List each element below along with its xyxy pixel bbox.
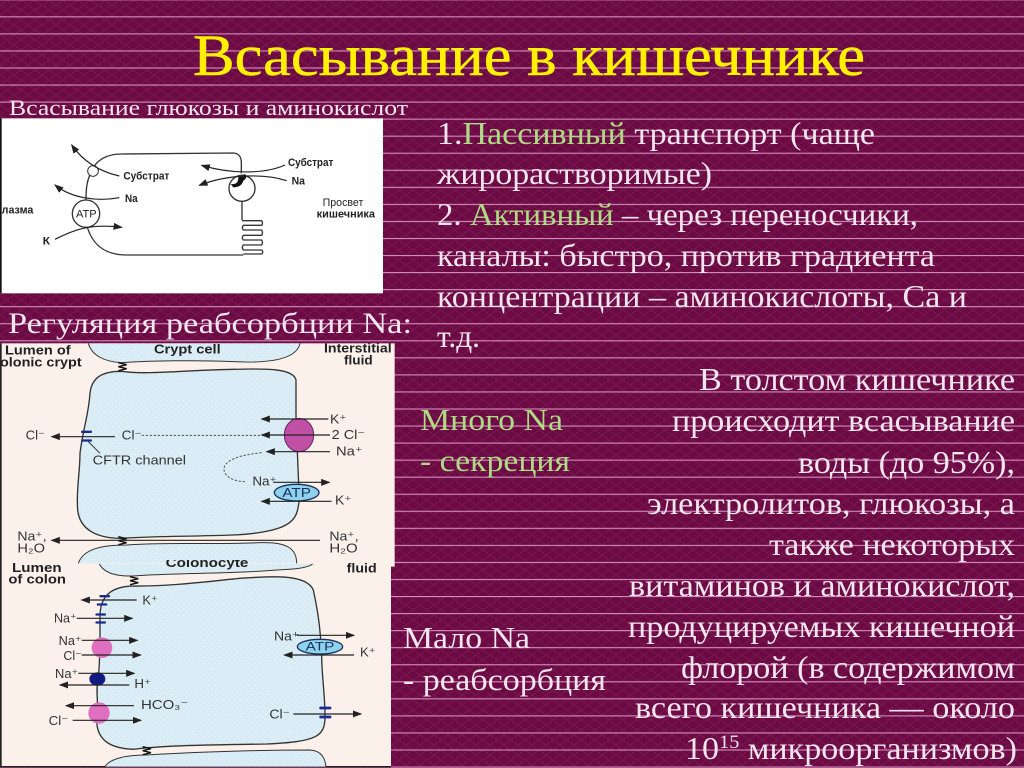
text: low sodium reabsorption: - реабсорбция [403,662,606,697]
text block: large intestine absorption: всего кишечника — около [635,689,1015,725]
text block: large intestine absorption: флорой (в содержимом [681,649,1015,685]
text block: large intestine absorption: продуцируемых кишечной [628,608,1015,644]
icon: cotransporter right [229,174,255,201]
text block: transport types: каналы: быстро, против градиента [437,237,935,273]
text block: transport types: 1.Пассивный транспорт (чаще [437,115,875,151]
diagram labels: лазма [2,205,33,217]
icon: cotransporter [284,418,314,452]
diagram labels: H₂O [17,541,45,555]
icon: substrate carrier left [88,166,98,176]
icon: ATP pump [72,200,100,227]
icon: ATP pump: ATP [282,486,311,500]
transport arrows [60,600,361,720]
diagram labels: Interstitial [324,341,392,355]
text block: large intestine absorption: электролитов, глюкозы, а [647,485,1015,521]
diagram labels: Cl⁻ [49,714,68,728]
heading: glucose and amino acid absorption: Всасывание глюкозы и аминокислот [9,95,408,120]
text block: large intestine absorption: В толстом кишечнике [699,361,1015,397]
diagram labels: olonic crypt [0,355,83,369]
text: high sodium secretion [420,402,570,478]
lower cell fragment [105,750,326,767]
text block: transport types: 2. Активный – через переносчики, [437,196,918,232]
diagram labels: Просвет [323,197,363,209]
diagram labels: Na⁺, [17,529,47,543]
diagram labels: fluid [347,561,377,575]
diagram labels: Colonocyte [166,555,248,570]
icon: ATP pump [297,639,343,654]
text block: large intestine absorption: 10 [685,730,717,766]
diagram labels: K⁺ [335,494,352,508]
diagram labels: 2 Cl⁻ [332,428,365,442]
diagram labels: K⁺ [360,646,376,660]
text block: large intestine absorption: микроорганизмов) [739,730,1017,766]
diagram labels: Lumen [12,561,62,575]
cell outline [86,153,243,255]
diagram: glucose and amino acid absorption [0,118,383,293]
diagram labels: Na⁺ [336,445,363,459]
tight junctions [118,363,127,545]
arrows [55,145,287,239]
membrane channels [95,595,331,718]
diagram labels: Cl⁻ [26,429,45,443]
text block: large intestine absorption: витаминов и аминокислот, [629,567,1015,603]
diagram labels: Cl⁻ [122,429,142,443]
transport arrows [52,419,332,540]
diagram labels: Субстрат [288,157,333,169]
diagram labels: H⁺ [134,677,151,691]
diagram labels: Na⁺ [55,667,78,681]
diagram labels: Na⁺ [54,612,77,626]
icon: ATP pump: ATP [306,640,334,654]
diagram labels: кишечника [317,208,375,220]
text block: transport types: жирорастворимые) [436,155,712,191]
text: low sodium reabsorption: Мало Na [403,620,530,655]
text: high sodium secretion: - секреция [420,443,570,478]
crypt cell body [77,369,299,538]
heading: sodium reabsorption regulation: Регуляция реабсорбции Na: [8,307,412,340]
icon: ATP pump: ATP [76,209,97,221]
colonocyte body [97,577,325,749]
icon: exchangers [88,637,112,724]
text: low sodium reabsorption [403,620,606,697]
text block: transport types: т.д. [437,318,480,354]
tight junctions [130,577,151,755]
diagram labels: K⁺ [142,593,158,607]
diagram labels [0,341,392,555]
upper cell fragment [88,343,300,363]
title: Всасывание в кишечнике [193,23,865,88]
diagram labels: K⁺ [330,412,347,426]
diagram labels: H₂O [329,541,358,555]
diagram labels: Na⁺ [59,634,82,648]
diagram labels: Cl⁻ [63,649,82,663]
diagram labels: HCO₃⁻ [141,698,188,712]
diagram labels: Cl⁻ [269,708,290,722]
diagram labels: Субстрат [123,170,169,182]
intestinal microvilli [242,221,263,254]
diagram labels: fluid [344,353,373,367]
diagram labels: К [43,235,51,247]
text block: large intestine absorption: 15 [719,732,739,753]
text block: transport types: концентрации – аминокислоты, Са и [437,278,967,314]
diagram labels: of colon [8,573,66,587]
diagram labels: Na⁺ [274,630,299,644]
text: high sodium secretion: Много Na [420,402,563,437]
diagram labels: Lumen of [5,343,72,357]
diagram labels [2,157,375,247]
text block: large intestine absorption: воды (до 95%), [798,444,1015,480]
text block: transport types [436,115,967,354]
diagram labels: Crypt cell [154,343,221,357]
lower cell fragment [78,543,297,563]
diagram labels: CFTR channel [93,454,186,468]
diagram labels: Na [292,176,305,188]
diagram: colonocyte [0,555,391,767]
text block: large intestine absorption: также некоторых [769,526,1015,562]
diagram labels [8,555,377,728]
diagram labels: Na⁺, [329,529,359,543]
text block: large intestine absorption [628,361,1017,766]
diagram: colonic crypt cell [0,341,395,567]
diagram labels: Na [125,193,138,205]
CFTR channel [81,431,100,453]
icon: ATP pump [274,484,319,501]
diagram labels: Na⁺ [252,475,277,489]
text block: large intestine absorption: происходит всасывание [672,402,1015,438]
upper cell fragment [99,564,313,576]
